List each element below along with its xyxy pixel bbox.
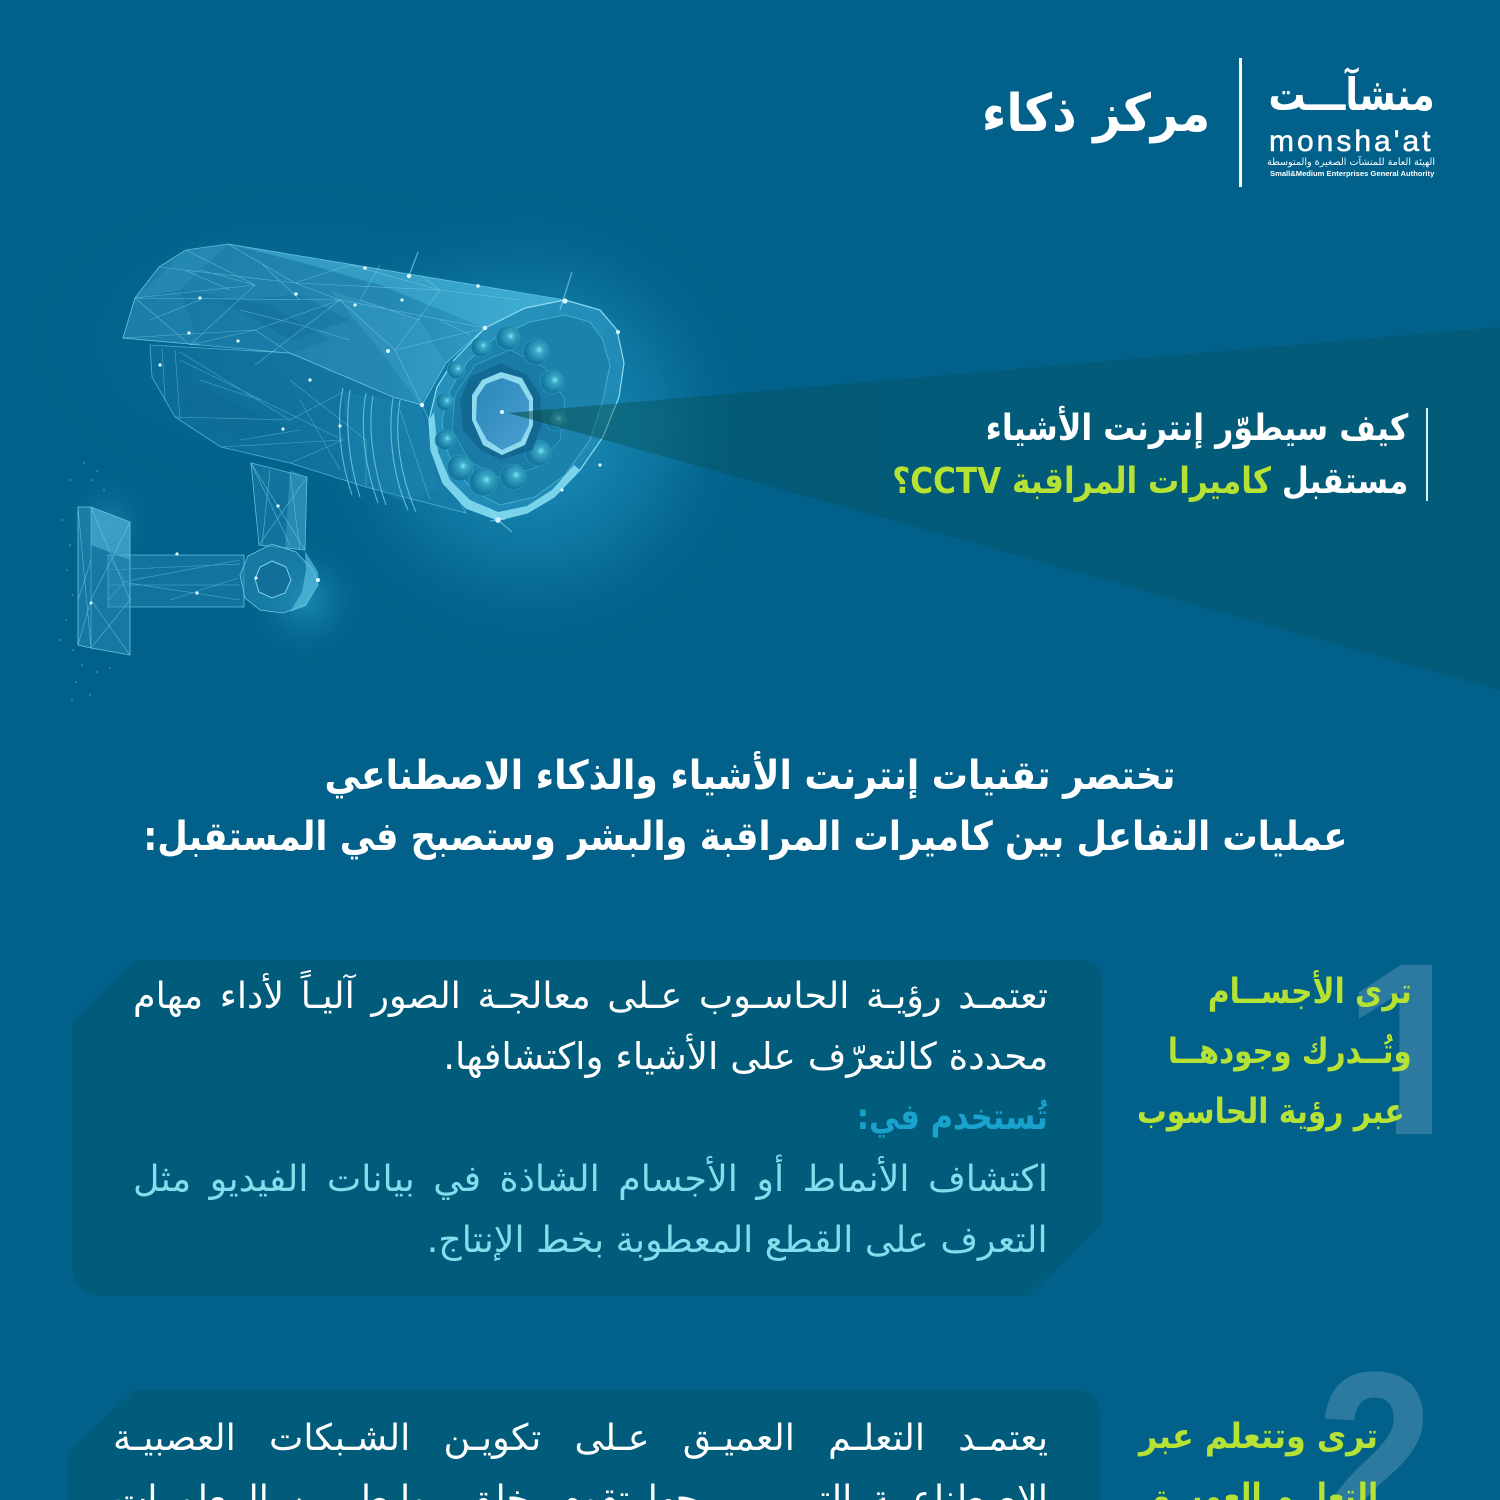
particles near wall plate	[59, 462, 111, 701]
section 1 body text	[133, 970, 1048, 1261]
intro heading: عمليات التفاعل بين كاميرات المراقبة والبشر وستصبح في المستقبل:	[143, 814, 1347, 860]
logo Arabic wordmark: منشآـــت	[1269, 68, 1435, 121]
uses label: تُستخدم في:	[857, 1097, 1048, 1138]
logo Latin wordmark: monsha'at	[1269, 125, 1433, 158]
subtitle: مستقبل كاميرات المراقبة CCTV؟	[892, 461, 1408, 502]
subtitle	[892, 406, 1408, 502]
section 1 heading: وتُــدرك وجودهــا	[1168, 1032, 1412, 1072]
logo English tagline: Small&Medium Enterprises General Authority	[1270, 169, 1434, 178]
infrared LEDs	[435, 326, 567, 496]
section 1 heading: عبر رؤية الحاسوب	[1137, 1092, 1405, 1132]
logo: Monsha'at	[1267, 67, 1435, 178]
section 1 body text: محددة كالتعرّف على الأشياء واكتشافها.	[443, 1035, 1048, 1078]
section 1 heading: ترى الأجســام	[1208, 972, 1412, 1012]
number 1: 1	[1342, 912, 1479, 1187]
section 2 heading	[1138, 1417, 1378, 1500]
section 2 body text	[113, 1416, 1048, 1500]
logo Arabic tagline: الهيئة العامة للمنشآت الصغيرة والمتوسطة	[1267, 157, 1435, 168]
section 2 body text: يعتمـد التعلـم العميـق عـلى تكويـن الشـبكات العصبيـة	[113, 1416, 1048, 1459]
intro heading	[143, 751, 1347, 860]
camera hood	[123, 244, 565, 405]
light sparkle dots	[90, 266, 620, 604]
camera front ring and lens	[429, 300, 624, 520]
section 1 body text: تعتمـد رؤيـة الحاسـوب عـلى معالجـة الصور آليـاً لأداء مهام	[133, 974, 1048, 1017]
beam of light from camera lens	[508, 327, 1500, 690]
intro heading: تختصر تقنيات إنترنت الأشياء والذكاء الاصطناعي	[324, 753, 1175, 799]
section 1 heading	[1137, 970, 1412, 1132]
header divider	[1238, 58, 1242, 187]
uses description: اكتشاف الأنماط أو الأجسام الشاذة في بيانات الفيديو مثل	[133, 1157, 1048, 1200]
camera body	[150, 345, 466, 513]
wall mount arm	[78, 463, 318, 655]
light flares	[409, 252, 572, 532]
header title: مركز ذكاء	[982, 84, 1210, 144]
illustration: low-poly surveillance camera	[59, 244, 703, 701]
subtitle rule	[1426, 408, 1428, 501]
section 1 body text: التعرف على القطع المعطوبة بخط الإنتاج.	[427, 1218, 1048, 1261]
section 2 heading: ترى وتتعلم عبر	[1139, 1417, 1378, 1457]
glow: camera halo	[0, 160, 775, 670]
subtitle: كيف سيطوّر إنترنت الأشياء	[985, 408, 1408, 449]
